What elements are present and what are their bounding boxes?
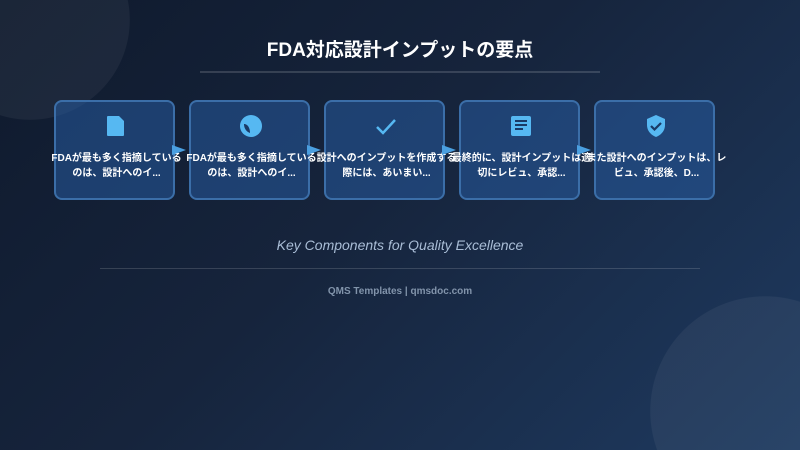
footer: QMS Templates | qmsdoc.com [328,286,472,297]
arrow 1 [172,145,186,155]
icon: shield [647,115,665,137]
arrow 4 [577,145,591,155]
card 3 [324,100,445,200]
text 5: また設計へのインプットは、レ [587,153,726,164]
text 2: のは、設計へのイ... [207,168,296,179]
text 1 [51,152,182,179]
text 5: ビュ、承認後、D... [614,168,699,179]
icon: document [107,116,124,136]
text 1: のは、設計へのイ... [72,168,161,179]
card 1 [54,100,175,200]
text 3: 設計へのインプットを作成する [317,153,456,164]
card 5 [594,100,715,200]
arrow 2 [307,145,321,155]
text 1: FDAが最も多く指摘している [51,153,182,164]
icon: leaf circle [240,115,262,137]
icon: article [511,116,531,136]
title: FDA対応設計インプットの要点 [267,40,533,61]
subtitle: Key Components for Quality Excellence [277,237,523,253]
text 2: FDAが最も多く指摘している [186,153,317,164]
text 2 [186,152,317,179]
text 4 [452,152,591,179]
text 3: 際には、あいまい... [342,168,431,179]
text 3 [316,152,456,179]
text 5 [587,152,726,179]
card 2 [189,100,310,200]
text 4: 切にレビュ、承認... [477,168,566,179]
card 4 [459,100,580,200]
text 4: 最終的に、設計インプットは適 [452,153,591,164]
arrow 3 [442,145,456,155]
icon: check [376,119,396,135]
